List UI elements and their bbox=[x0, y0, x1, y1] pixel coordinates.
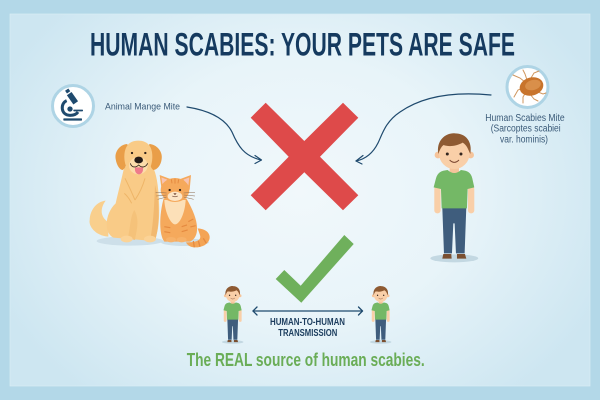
arrow: human mite to cross bbox=[356, 94, 491, 164]
icon: microscope badge bbox=[52, 86, 94, 126]
arrow: animal mite to cross bbox=[187, 107, 262, 164]
label: human scabies mite: var. hominis) bbox=[500, 134, 548, 145]
label: human scabies mite: Human Scabies Mite bbox=[485, 113, 565, 124]
icon: scabies mite badge bbox=[507, 66, 548, 108]
caption: real source: The REAL source of human scabies. bbox=[187, 350, 425, 370]
icon: green check mark bbox=[276, 235, 354, 303]
label: animal mange mite: Animal Mange Mite bbox=[105, 102, 180, 112]
arrow: two-way transmission bbox=[253, 307, 362, 315]
icon: small person left bbox=[222, 286, 243, 344]
icon: small person right bbox=[370, 286, 391, 344]
icon: large person bbox=[430, 133, 478, 262]
label: human-to-human transmission: TRANSMISSION bbox=[278, 328, 337, 339]
icon: dog and cat illustration bbox=[89, 141, 210, 247]
icon: red cross bbox=[251, 103, 358, 210]
label: human-to-human transmission: HUMAN-TO-HUMAN bbox=[270, 317, 345, 328]
label: human scabies mite: (Sarcoptes scabiei bbox=[491, 124, 561, 135]
